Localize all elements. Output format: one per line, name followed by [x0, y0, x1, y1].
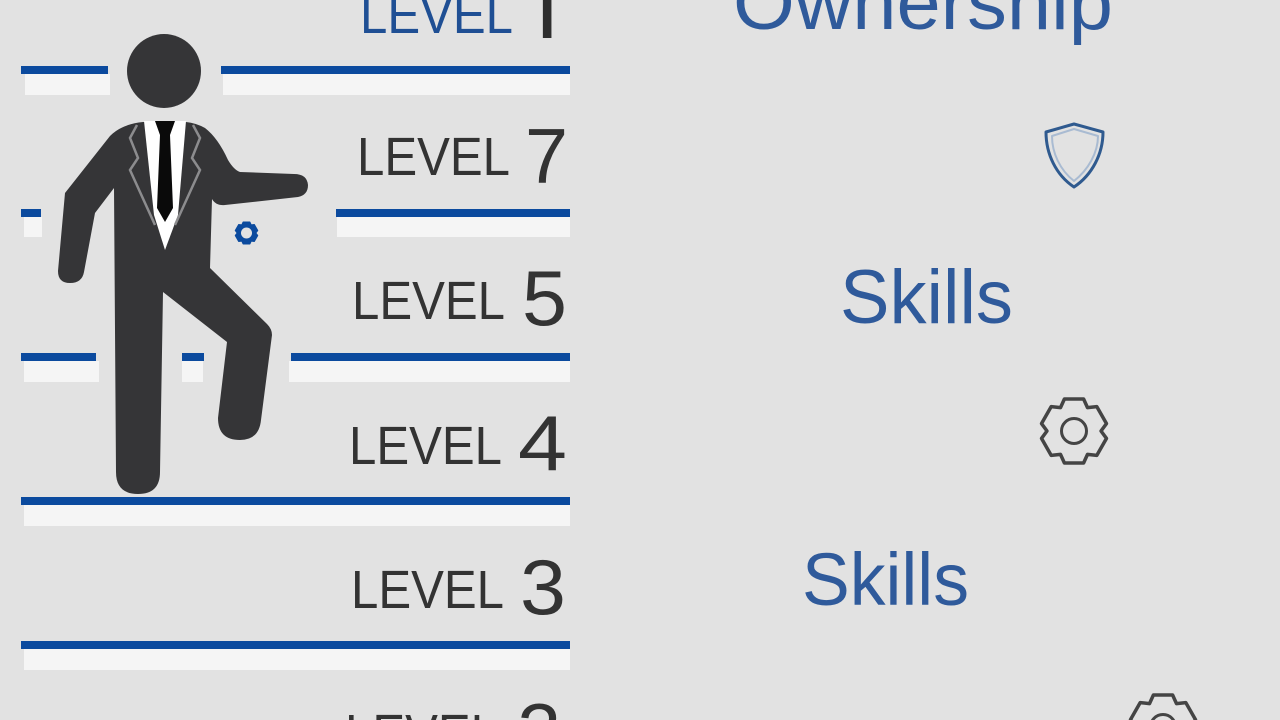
step line below level 5: [21, 353, 570, 382]
step line below level 7: [21, 209, 570, 237]
businessman climbing steps: [58, 34, 308, 494]
step line below level 3: [21, 641, 570, 670]
level 3 label: LEVEL: [351, 560, 504, 620]
level 4 label: 4: [518, 399, 567, 487]
level 7 label: LEVEL: [357, 127, 510, 187]
level 2 label: [345, 687, 561, 720]
level 5 label: LEVEL: [352, 271, 505, 331]
heading: Skills lower: Skills: [802, 538, 969, 621]
head: [127, 34, 201, 108]
level 3 label: [351, 543, 566, 631]
suit body and legs: [58, 122, 308, 494]
shirt: [144, 121, 186, 250]
level 3 label: 3: [520, 543, 566, 631]
level 5 label: 5: [522, 254, 567, 342]
icon: small blue gear: [235, 222, 258, 244]
level 4 label: LEVEL: [349, 416, 502, 476]
lapels: [130, 125, 200, 225]
tie: [155, 121, 175, 222]
level 4 label: [349, 399, 567, 487]
step line below level 4: [21, 497, 570, 526]
level 7 label: [357, 112, 568, 200]
level 7 label: 7: [525, 112, 568, 200]
step line at level 7 top, split around head: [21, 66, 570, 95]
icon: shield: [1046, 124, 1103, 187]
icon: gear cropped at bottom: [1130, 695, 1196, 720]
icon: gear: [1042, 399, 1106, 463]
level 5 label: [352, 254, 567, 342]
heading: Skills upper: Skills: [840, 255, 1013, 340]
